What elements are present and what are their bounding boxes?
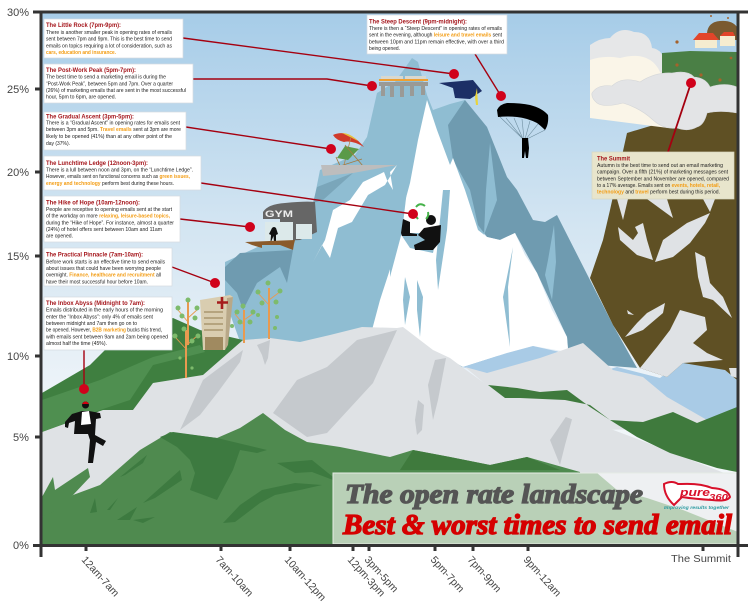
icon: hospital — [200, 295, 233, 350]
text box: The Gradual Ascent: The Gradual Ascent (3pm-5pm): — [46, 114, 134, 120]
y axis labels: 20% — [7, 167, 29, 179]
icon: graduation cap — [439, 80, 482, 105]
x axis labels: 9pm-12am — [521, 554, 563, 599]
text box: The Little Rock: The Little Rock (7pm-9pm): — [46, 22, 121, 29]
banner title: Best & worst times to send email — [342, 510, 732, 541]
text box: The Summit: to a 17% average. Emails sent on events, hotels, retail, — [597, 183, 721, 189]
text box: The Post-Work Peak — [44, 64, 193, 103]
text box: The Practical Pinnacle — [44, 248, 172, 286]
x axis labels: The Summit — [671, 553, 731, 565]
text box: The Summit: Autumn is the best time to send out an email marketing — [597, 163, 723, 169]
text box: The Practical Pinnacle: have their most successful hour before 10am. — [46, 279, 148, 285]
text box: The Inbox Abyss — [44, 297, 172, 350]
y axis labels: 10% — [7, 351, 29, 363]
y axis labels: 15% — [7, 251, 29, 263]
connector lines — [84, 38, 691, 389]
text box: The Post-Work Peak: hour, 5pm to 6pm, are opened. — [46, 95, 116, 101]
text box: The Gradual Ascent: between 3pm and 5pm. Travel emails sent at 3pm are more — [46, 127, 181, 133]
x axis labels: 12pm-3pm — [345, 554, 387, 599]
snow on main peak — [313, 100, 568, 367]
text box: The Summit — [592, 152, 734, 199]
grey mountain range — [42, 327, 736, 496]
lake — [463, 346, 736, 420]
logo: pure360 — [664, 482, 730, 511]
text box: The Hike of Hope: are opened. — [46, 234, 73, 240]
text box: The Practical Pinnacle: Before work starts is an effective time to send emails — [46, 259, 165, 265]
left green hill — [42, 318, 243, 432]
text box: The Gradual Ascent — [44, 112, 186, 150]
red markers — [79, 69, 696, 394]
icon: businessman falling — [65, 402, 106, 463]
text box: The Inbox Abyss: enter the “Inbox Abyss”: only 4% of emails sent — [46, 314, 154, 320]
text box: The Lunchtime Ledge: However, emails sent on functional concerns such as green issues, — [46, 174, 191, 180]
text box: The Inbox Abyss: be opened. However, B2B marketing bucks this trend, — [46, 328, 162, 334]
icon: parachutist — [497, 103, 548, 158]
brown mountain — [590, 100, 737, 380]
y axis labels: 30% — [7, 7, 29, 19]
text box: The Post-Work Peak: The Post-Work Peak (5pm-7pm): — [46, 67, 136, 74]
text box: The Inbox Abyss: The Inbox Abyss (Midnight to 7am): — [46, 300, 145, 307]
banner title — [342, 479, 732, 541]
text box: The Post-Work Peak: “Post-Work Peak”, between 5pm and 7pm. Over a quarter — [46, 81, 173, 87]
text box: The Practical Pinnacle: overnight. Finance, healthcare and recruitment all — [46, 273, 161, 279]
text box: The Steep Descent: The Steep Descent (9pm-midnight): — [369, 18, 467, 25]
text box: The Inbox Abyss: almost half the time (45%). — [46, 341, 107, 347]
text box: The Summit: technology and travel perform best during this period. — [597, 190, 720, 196]
text box: The Summit: between September and November are opened, compared — [597, 176, 729, 182]
text box: The Hike of Hope — [44, 196, 180, 242]
banner background — [333, 473, 738, 545]
x axis labels: 10am-12pm — [282, 554, 328, 604]
text box: The Steep Descent: sent in the evening, although leisure and travel emails sent — [369, 33, 503, 39]
banner title: The open rate landscape — [345, 479, 643, 509]
text box: The Inbox Abyss: between midnight and 7am then go on to — [46, 321, 137, 327]
x axis labels — [79, 553, 731, 604]
y axis labels: 25% — [7, 84, 29, 96]
logo: pure360: Improving results together — [664, 505, 730, 511]
text box: The Hike of Hope: during the “Hike of Hope”. For instance, almost a quarter — [46, 220, 174, 226]
icon: gym building — [245, 202, 317, 250]
text box: The Little Rock — [44, 19, 183, 58]
text box: The Summit: The Summit — [597, 156, 631, 162]
text box: The Summit: campaign. Over a fifth (21%) of marketing messages sent — [597, 170, 729, 176]
text box: The Little Rock: cars, education and insurance. — [46, 50, 117, 56]
text box: The Steep Descent: between 10pm and 11pm remain effective, with over a third — [369, 39, 504, 45]
text box: The Steep Descent: being opened. — [369, 46, 400, 52]
x axis labels: 12am-7am — [79, 554, 121, 599]
foreground green hills — [42, 413, 590, 545]
icon: money trees — [172, 280, 282, 378]
text box: The Post-Work Peak: (26%) of marketing emails that are sent in the most successful — [46, 88, 186, 94]
icon: gym building: GYM — [265, 209, 293, 219]
text box: The Gradual Ascent: There is a “Gradual Ascent” in opening rates for emails sent — [46, 120, 181, 126]
text box: The Practical Pinnacle: The Practical Pinnacle (7am-10am): — [46, 252, 143, 258]
text box: The Post-Work Peak: The best time to send a marketing email is during the — [46, 75, 166, 81]
text box: The Lunchtime Ledge: The Lunchtime Ledge (12noon-3pm): — [46, 160, 148, 167]
text box: The Gradual Ascent: day (37%). — [46, 141, 70, 147]
text box: The Lunchtime Ledge — [44, 156, 201, 190]
icon: beach chair and umbrella — [333, 133, 364, 168]
text box: The Practical Pinnacle: about issues that could have been worrying people — [46, 266, 161, 272]
text box: The Inbox Abyss: Emails distributed in the early hours of the morning — [46, 308, 163, 314]
text box: The Inbox Abyss: with emails sent between 9am and 2am being opened — [46, 334, 168, 340]
x axis labels: 5pm-7pm — [428, 554, 467, 595]
y axis labels: 0% — [13, 540, 29, 552]
text box: The Lunchtime Ledge: There is a lull between noon and 3pm, on the “Lunchtime Ledge”. — [46, 168, 193, 174]
icon: person at computer — [401, 204, 441, 250]
icon: train on bridge — [379, 76, 428, 97]
logo: pure360: pure — [679, 487, 710, 499]
text box: The Little Rock: sent between 7pm and 9pm. This is the best time to send — [46, 37, 172, 43]
x axis labels: 7pm-9pm — [465, 554, 504, 595]
text box: The Gradual Ascent: likely to be opened (41%) than at any other point of the — [46, 134, 172, 140]
y axis labels: 5% — [13, 432, 29, 444]
text box: The Hike of Hope: The Hike of Hope (10am-12noon): — [46, 199, 140, 206]
ledge — [321, 165, 397, 176]
text box: The Hike of Hope: People are receptive to opening emails sent at the start — [46, 207, 173, 213]
x axis labels: 7am-10am — [213, 554, 255, 599]
text box: The Steep Descent: There is then a “Steep Descent” in opening rates of emails — [369, 26, 502, 32]
clouds and hilltop — [590, 30, 737, 130]
text box: The Steep Descent — [367, 15, 507, 54]
y axis labels — [7, 7, 29, 552]
text box: The Hike of Hope: (24%) of hotel offers sent between 10am and 11am — [46, 227, 162, 233]
houses on hilltop — [675, 15, 737, 82]
blue mountain — [225, 58, 637, 370]
text box: The Lunchtime Ledge: energy and technology perform best during these hours. — [46, 181, 174, 187]
text box: The Little Rock: emails on topics requiring a lot of consideration, such as — [46, 43, 172, 49]
text box: The Little Rock: There is another smaller peak in opening rates of emails — [46, 30, 172, 36]
x axis labels: 3pm-5pm — [362, 554, 401, 595]
text box: The Hike of Hope: of the workday on more relaxing, leisure-based topics, — [46, 214, 171, 220]
logo: pure360: 360 — [709, 493, 729, 502]
